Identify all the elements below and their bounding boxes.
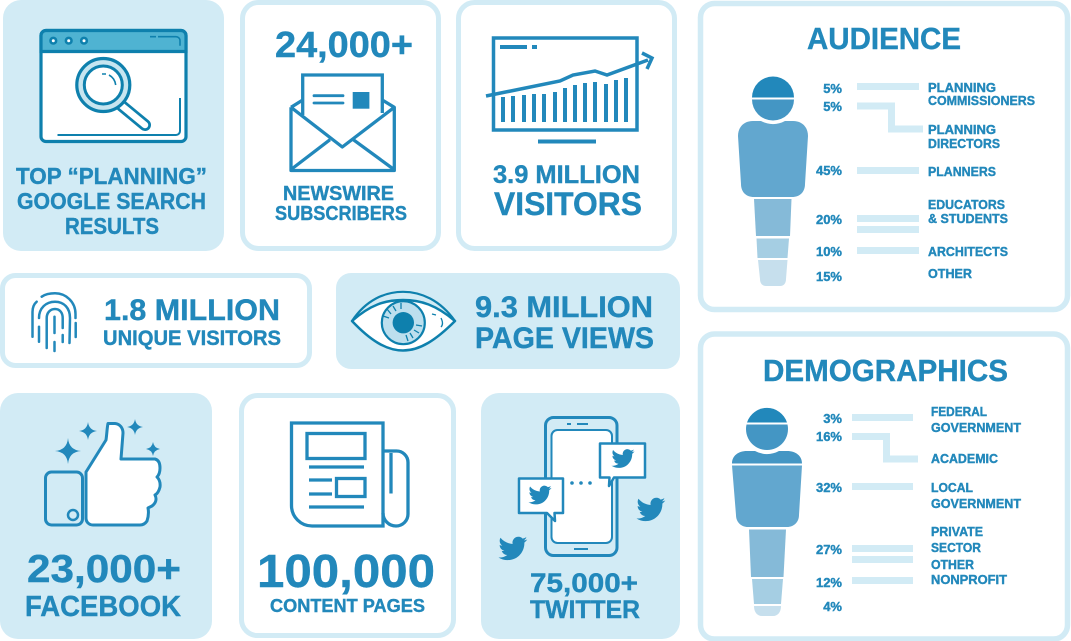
icon: twitter bird left xyxy=(498,537,527,560)
category labels: GOVERNMENT xyxy=(931,496,1021,511)
percentages: 3% xyxy=(823,411,842,426)
stat: 9.3 million page views: PAGE VIEWS xyxy=(475,322,654,355)
panel: visitors xyxy=(458,2,674,248)
category labels: PLANNING xyxy=(928,122,996,137)
category labels: PRIVATE xyxy=(931,524,983,539)
stat: 3.9 million visitors: VISITORS xyxy=(494,186,642,222)
stat: 1.8 million unique visitors: UNIQUE VISITORS xyxy=(103,327,281,350)
percentages: 12% xyxy=(816,575,842,590)
icon: thumbs up xyxy=(46,419,160,525)
panel: demographics xyxy=(700,334,1068,639)
icon: browser with magnifier xyxy=(41,30,186,142)
icon: newspaper xyxy=(292,423,408,526)
card background xyxy=(3,0,224,251)
icon: envelope xyxy=(291,75,394,170)
label: top planning google search results: RESULTS xyxy=(65,213,159,239)
heading: audience: AUDIENCE xyxy=(807,21,961,56)
percentages: 5% xyxy=(823,81,842,96)
stat: 1.8 million unique visitors: 1.8 MILLION xyxy=(104,294,280,327)
category labels: OTHER xyxy=(928,266,973,281)
label: newswire subscribers xyxy=(275,183,407,225)
stat: 1.8 million unique visitors xyxy=(103,294,281,350)
card background xyxy=(0,393,212,639)
percentages: 27% xyxy=(816,542,842,557)
card background xyxy=(481,393,680,639)
label: top planning google search results xyxy=(16,163,207,239)
category labels: ARCHITECTS xyxy=(928,244,1008,259)
card border xyxy=(700,4,1068,310)
figure: demographics person xyxy=(732,408,802,616)
percentages: 16% xyxy=(816,429,842,444)
category labels: LOCAL xyxy=(931,480,973,495)
percentages xyxy=(816,81,842,284)
panel: content pages xyxy=(242,396,454,636)
card border xyxy=(700,334,1068,639)
panel: page views xyxy=(336,273,680,369)
connector bars xyxy=(857,83,923,254)
category labels: EDUCATORS xyxy=(928,197,1005,212)
heading: demographics: DEMOGRAPHICS xyxy=(763,353,1008,388)
category labels: ACADEMIC xyxy=(931,451,999,466)
category labels xyxy=(931,404,1021,587)
icon: twitter bird right xyxy=(636,498,665,521)
percentages: 4% xyxy=(823,599,842,614)
category labels: PLANNERS xyxy=(928,164,996,179)
percentages: 15% xyxy=(816,269,842,284)
percentages: 45% xyxy=(816,163,842,178)
stat: 100,000 content pages: 100,000 xyxy=(257,545,435,597)
stat: 24,000+: 24,000+ xyxy=(275,24,413,65)
category labels: GOVERNMENT xyxy=(931,420,1021,435)
stat: 9.3 million page views: 9.3 MILLION xyxy=(475,291,653,324)
stat: 23,000+ facebook xyxy=(25,548,181,623)
icon: fingerprint xyxy=(32,293,76,351)
percentages: 10% xyxy=(816,244,842,259)
card border xyxy=(458,2,674,248)
category labels xyxy=(928,80,1035,281)
label: top planning google search results: GOOGLE SEARCH xyxy=(17,188,206,214)
category labels: NONPROFIT xyxy=(931,572,1007,587)
stat: 23,000+ facebook: FACEBOOK xyxy=(25,591,181,623)
panel: audience xyxy=(700,4,1068,310)
icon: monitor with rising chart xyxy=(486,38,652,142)
panel: newswire subscribers xyxy=(242,2,438,248)
card border xyxy=(2,276,310,366)
percentages: 32% xyxy=(816,480,842,495)
stat: 9.3 million page views xyxy=(475,291,654,355)
category labels: PLANNING xyxy=(928,80,996,95)
stat: 3.9 million visitors: 3.9 MILLION xyxy=(493,161,640,189)
category labels: & STUDENTS xyxy=(928,211,1008,226)
category labels: COMMISSIONERS xyxy=(928,93,1035,108)
stat: 3.9 million visitors xyxy=(493,161,642,222)
label: newswire subscribers: SUBSCRIBERS xyxy=(275,203,407,225)
percentages: 5% xyxy=(823,99,842,114)
icon: eye xyxy=(352,292,455,350)
category labels: FEDERAL xyxy=(931,404,987,419)
stat: 75,000+ twitter: TWITTER xyxy=(530,596,640,624)
panel: facebook xyxy=(0,393,212,639)
panel: google search results xyxy=(3,0,224,251)
card background xyxy=(336,273,680,369)
icon: phone with tweets xyxy=(519,418,645,556)
stat: 23,000+ facebook: 23,000+ xyxy=(27,548,181,591)
stat: 100,000 content pages: CONTENT PAGES xyxy=(270,596,425,616)
stat: 75,000+ twitter xyxy=(530,568,640,624)
connector bars xyxy=(852,414,918,584)
category labels: OTHER xyxy=(931,557,975,572)
stat: 100,000 content pages xyxy=(257,545,435,616)
stat: 75,000+ twitter: 75,000+ xyxy=(530,568,638,598)
percentages: 20% xyxy=(816,212,842,227)
card border xyxy=(242,396,454,636)
card border xyxy=(242,2,438,248)
figure: audience person xyxy=(738,76,808,286)
label: top planning google search results: TOP “PLANNING” xyxy=(16,163,207,189)
panel: twitter xyxy=(481,393,680,639)
category labels: DIRECTORS xyxy=(928,136,1000,151)
label: newswire subscribers: NEWSWIRE xyxy=(283,183,394,205)
panel: unique visitors xyxy=(2,276,310,366)
category labels: SECTOR xyxy=(931,540,982,555)
percentages xyxy=(816,411,842,614)
